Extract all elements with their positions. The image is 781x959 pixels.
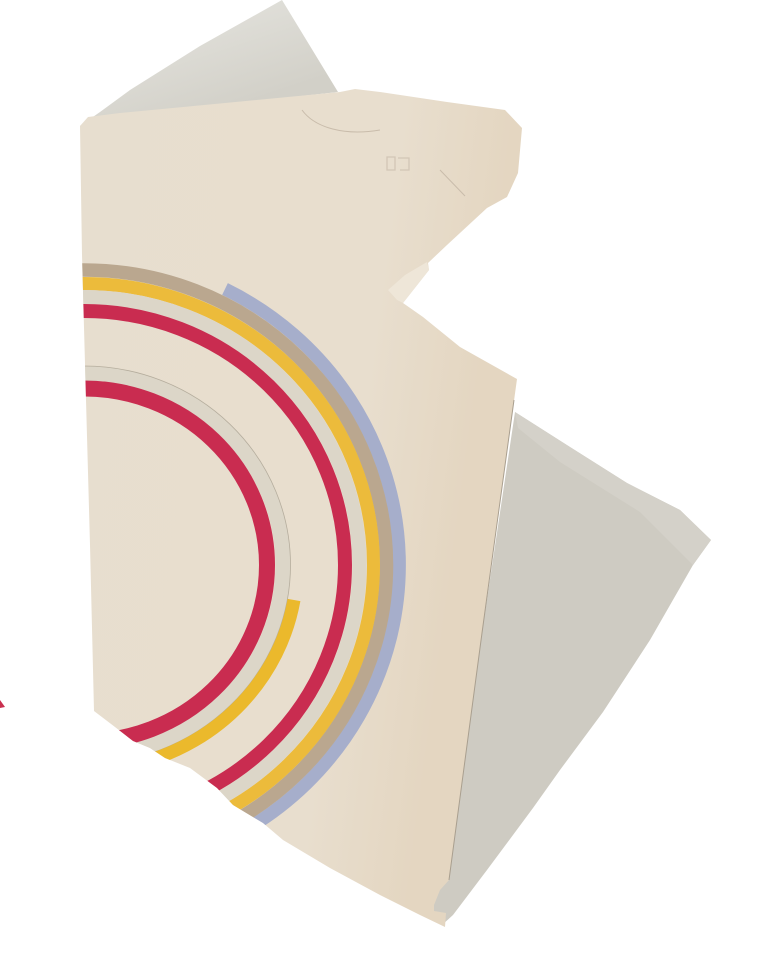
arc: red inner [85, 380, 275, 742]
torn flap in notch [388, 262, 429, 303]
arc: grey band inner [85, 366, 290, 752]
arc: taupe [82, 263, 394, 818]
back sheet: top grey flap [80, 0, 338, 126]
arc: grey band outline [85, 366, 291, 752]
arc: blue outer [225, 289, 399, 833]
concentric arcs [82, 263, 406, 825]
arc: red outer [83, 304, 352, 790]
small red fragment at left edge [0, 700, 5, 708]
arc: yellow inner [140, 600, 294, 763]
stamp mark [387, 157, 409, 170]
crease marks [302, 110, 465, 196]
fold edge line [449, 400, 514, 880]
flap lighter upper band [515, 412, 711, 565]
back sheet: lower right grey flap [430, 412, 711, 925]
arc: grey band outer [83, 290, 366, 801]
arc: yellow outer [82, 277, 380, 810]
paper sheet [80, 89, 522, 927]
